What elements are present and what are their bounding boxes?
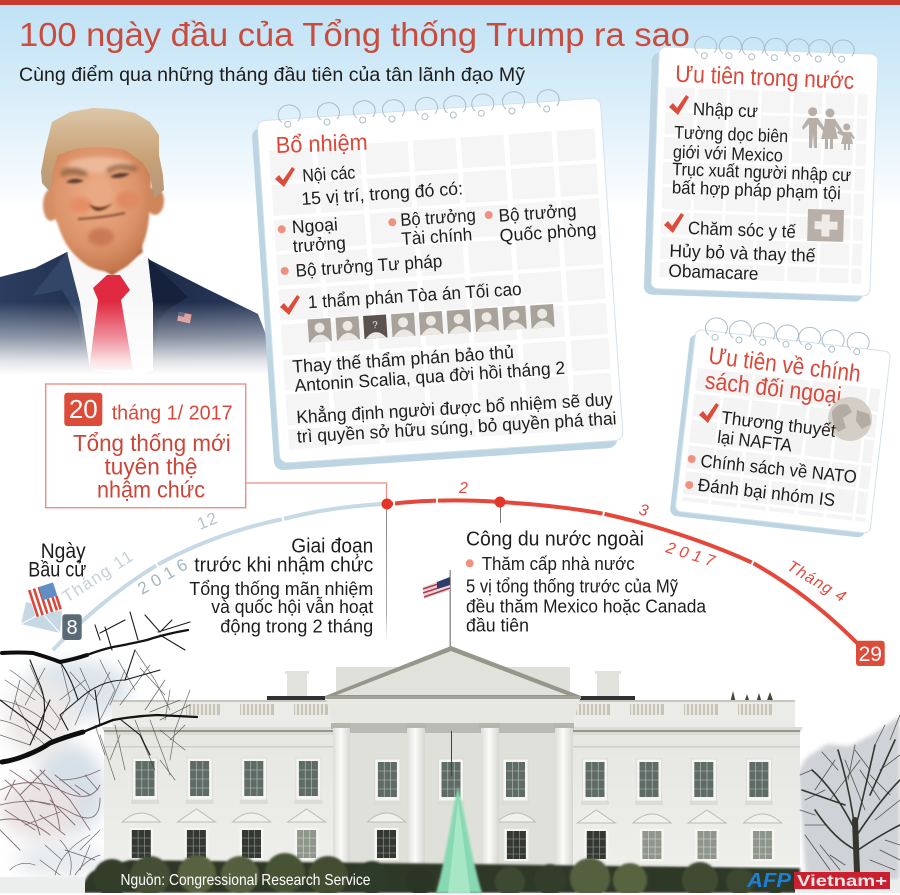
health care text: Obamacare xyxy=(668,261,759,284)
date badge 29: 29 xyxy=(859,643,882,666)
callout message: Tổng thống mới xyxy=(73,430,231,456)
Scalia replacement note: Antonin Scalia, qua đời hồi tháng 2 xyxy=(294,358,566,396)
window pediments xyxy=(122,809,782,823)
election day label: Bầu cử xyxy=(28,559,86,582)
parapet and balustrade xyxy=(112,701,795,728)
text: transition period: động trong 2 tháng xyxy=(220,617,373,637)
binder rings xyxy=(705,318,869,355)
panel: Bổ nhiệm (appointments) xyxy=(251,90,624,471)
flag on roof xyxy=(423,570,451,648)
arc labels 2016: 2016 xyxy=(134,555,191,598)
cabinet text xyxy=(301,162,464,209)
top red bar xyxy=(0,0,900,5)
arc month ticks xyxy=(155,498,754,568)
panel heading: Ưu tiên về chính xyxy=(707,342,862,388)
immigration text: bất hợp pháp phạm tội xyxy=(672,177,841,203)
notebook sheet xyxy=(644,46,878,302)
bullet list of cabinet posts: Bộ trưởng Tư pháp xyxy=(295,251,443,281)
Scalia replacement note xyxy=(292,342,566,396)
text: foreign trip: Thăm cấp nhà nước xyxy=(482,554,635,574)
bullet list of cabinet posts: trưởng xyxy=(292,233,346,256)
panel: Ưu tiên trong nước (domestic priorities) xyxy=(644,36,878,302)
neck xyxy=(72,235,143,276)
immigration text: giới với Mexico xyxy=(673,142,783,166)
panel: Ưu tiên về chính sách đối ngoại (foreign policy) xyxy=(669,318,891,539)
cabinet text: Nội các xyxy=(302,162,356,186)
nominee commitments note: trì quyền sở hữu súng, bỏ quyền phá thai xyxy=(296,408,617,447)
chimneys xyxy=(285,671,621,701)
photo: bushes xyxy=(0,853,900,895)
guide line: foreign trip xyxy=(500,504,501,523)
check icon: immigration xyxy=(669,95,689,115)
text: foreign trip: đều thăm Mexico hoặc Canada xyxy=(466,596,707,616)
facial features xyxy=(60,157,140,246)
date badge 8 xyxy=(62,614,82,640)
photo: fountain xyxy=(436,787,482,893)
icon: medical cross xyxy=(807,209,844,242)
bullet list of cabinet posts xyxy=(278,201,597,281)
arc labels 2017: 2017 xyxy=(663,539,718,571)
ground strips xyxy=(0,877,900,893)
timeline arc: transition period 2016 xyxy=(53,504,382,650)
health care text: Chăm sóc y tế xyxy=(688,218,796,242)
notebook sheet xyxy=(251,98,624,471)
immigration text: Tường dọc biên xyxy=(674,122,788,146)
justices icon row: ? xyxy=(372,320,379,331)
Scalia replacement note: Thay thế thẩm phán bảo thủ xyxy=(292,342,514,377)
immigration text xyxy=(672,122,851,203)
text: transition period xyxy=(189,536,373,637)
immigration text: Trục xuất người nhập cư xyxy=(672,159,851,185)
binder rings xyxy=(278,90,559,127)
callout message: nhậm chức xyxy=(97,477,205,503)
immigration heading: Nhập cư xyxy=(693,99,758,121)
arc labels 2017 xyxy=(458,480,848,606)
background sky gradient xyxy=(0,5,900,210)
source note: Nguồn: Congressional Research Service xyxy=(120,872,371,889)
foreign policy text: Đánh bại nhóm IS xyxy=(697,475,836,510)
bullet list of cabinet posts: Bộ trưởng xyxy=(400,205,476,230)
text: foreign trip: Công du nước ngoài xyxy=(466,529,644,551)
date badge 20: 20 xyxy=(69,394,98,424)
cornice xyxy=(102,727,803,735)
callout: inauguration 20 January 2017 xyxy=(46,384,246,508)
text: transition period: Tổng thống mãn nhiệm xyxy=(189,579,373,599)
bullet list of cabinet posts: Quốc phòng xyxy=(499,219,597,246)
windows lower xyxy=(129,828,775,861)
arc labels 2016: 12 xyxy=(194,509,220,534)
icon: ballot envelope with flag xyxy=(21,582,62,633)
date badge 20 xyxy=(64,393,102,426)
foreign policy text: Chính sách về NATO xyxy=(700,451,858,487)
arc labels 2016 xyxy=(59,509,220,606)
logo: AFP Vietnam+ xyxy=(733,870,890,892)
windows upper xyxy=(131,758,773,805)
check icon: cabinet xyxy=(275,167,295,187)
title: 100 ngày đầu của Tổng thống Trump ra sao xyxy=(19,16,690,53)
foreign policy text: Thương thuyết xyxy=(720,407,837,441)
election day label: Ngày xyxy=(41,540,86,563)
main wall xyxy=(104,733,800,865)
portrait: Donald Trump xyxy=(0,108,276,380)
date badge 8: 8 xyxy=(66,617,78,639)
marker: inauguration xyxy=(382,498,392,510)
bullet list of cabinet posts: Bộ trưởng xyxy=(498,201,577,226)
marker: foreign trip xyxy=(494,496,506,508)
icon: family xyxy=(802,107,855,150)
logo: AFP Vietnam+: Vietnam+ xyxy=(797,873,887,890)
justices icon row xyxy=(308,304,555,342)
foreign policy text xyxy=(685,407,858,510)
panel heading xyxy=(704,342,862,410)
suit and shirt fading into white xyxy=(0,252,276,380)
photo: left tree backdrop sky xyxy=(0,660,130,878)
dark roof strips xyxy=(267,696,635,701)
nominee commitments note xyxy=(296,388,617,447)
text: transition period: và quốc hội vẫn hoạt xyxy=(211,596,373,617)
notebook sheet xyxy=(669,329,891,539)
date text: tháng 1/ 2017 xyxy=(112,402,233,424)
check icon: NAFTA xyxy=(699,403,719,423)
text: foreign trip: 5 vị tổng thống trước của Mỹ xyxy=(466,577,678,597)
logo: AFP Vietnam+: AFP xyxy=(746,870,792,892)
roof shrubs xyxy=(730,691,774,703)
panel heading: Bổ nhiệm xyxy=(275,129,368,158)
icon: globe xyxy=(828,397,872,441)
guide line: transition xyxy=(386,504,387,640)
arc labels 2017: 2 xyxy=(458,480,468,497)
health care text: Hủy bỏ và thay thế xyxy=(669,241,816,266)
callout message xyxy=(73,430,231,503)
face xyxy=(43,143,164,272)
portico lantern chain xyxy=(451,731,452,776)
photo: right tree backdrop xyxy=(798,716,900,880)
pediment xyxy=(325,646,581,696)
cabinet text: 15 vị trí, trong đó có: xyxy=(301,178,464,209)
panel heading: sách đối ngoại xyxy=(704,367,843,410)
timeline arc: first 100 days 2017 xyxy=(390,500,860,646)
nominee commitments note: Khẳng định người được bổ nhiệm sẽ duy xyxy=(296,388,613,427)
text: foreign trip xyxy=(466,529,707,636)
inauguration connector line xyxy=(246,483,386,500)
check icon: health care xyxy=(664,213,684,233)
portico entablature xyxy=(325,696,581,723)
photo: right tree xyxy=(800,715,900,872)
callout message: tuyên thệ xyxy=(104,453,198,479)
arc labels 2016: Tháng 11 xyxy=(59,547,136,606)
election day label xyxy=(28,540,86,582)
text: transition period: trước khi nhậm chức xyxy=(194,555,373,577)
check icon: supreme court xyxy=(280,295,300,315)
columns xyxy=(331,723,574,870)
subtitle: Cùng điểm qua những tháng đầu tiên của tân lãnh đạo Mỹ xyxy=(19,64,525,86)
bullet list of cabinet posts: Tài chính xyxy=(401,224,473,249)
text: foreign trip: đầu tiên xyxy=(466,616,529,636)
portico recess xyxy=(340,723,566,865)
health care text xyxy=(668,218,816,284)
photo: White House xyxy=(102,570,803,870)
logo: AFP Vietnam+: © xyxy=(733,875,742,889)
hair xyxy=(41,108,164,198)
bullet list of cabinet posts: Ngoại xyxy=(291,214,338,237)
rear roof block xyxy=(336,667,570,699)
foreign policy text: lại NAFTA xyxy=(716,427,793,456)
binder rings xyxy=(695,36,854,62)
photo: left tree branches xyxy=(0,612,197,875)
text: transition period: Giai đoạn xyxy=(291,536,373,558)
arc labels 2017: 3 xyxy=(637,501,650,520)
arc labels 2017: Tháng 4 xyxy=(784,558,848,606)
supreme court heading: 1 thẩm phán Tòa án Tối cao xyxy=(307,279,522,312)
panel heading: Ưu tiên trong nước xyxy=(675,61,855,95)
